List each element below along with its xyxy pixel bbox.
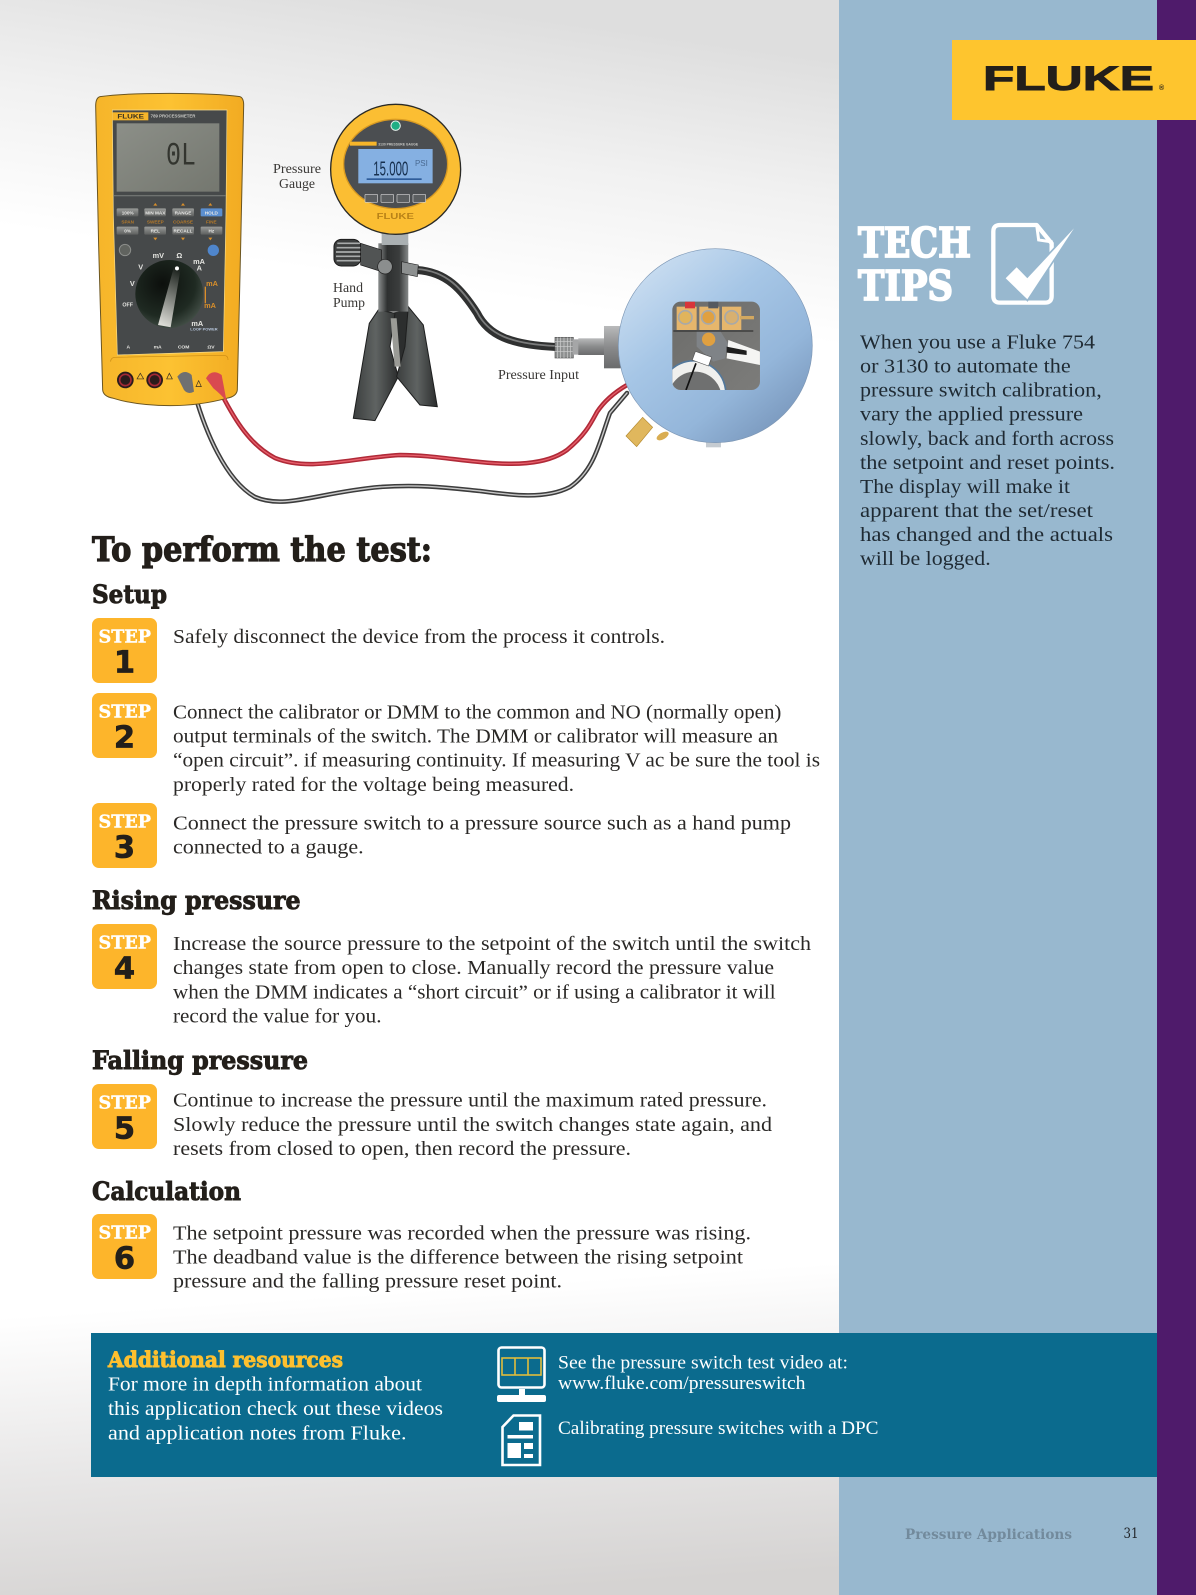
- step 2: [92, 693, 820, 796]
- meter buttons: 0%: [124, 228, 132, 233]
- step 2 badge: 2: [114, 721, 135, 756]
- label: hand pump: [333, 281, 365, 311]
- step 6: [92, 1214, 751, 1293]
- video link: [558, 1353, 848, 1394]
- gauge LCD: PSI: [415, 159, 428, 168]
- step 4 text: record the value for you.: [173, 1006, 382, 1028]
- illustration: multimeter: [96, 93, 244, 406]
- step 2 text: [173, 701, 820, 796]
- dial labels: A: [197, 264, 203, 273]
- label: pressure gauge: Gauge: [279, 177, 315, 192]
- dial labels: A: [127, 344, 131, 350]
- step 2 text: output terminals of the switch. The DMM or calibrator will measure an: [173, 725, 778, 747]
- dial labels: mA: [191, 319, 204, 328]
- step 4 badge: [92, 924, 157, 989]
- section heading: falling pressure: Falling pressure: [92, 1046, 308, 1075]
- meter buttons: FINE: [206, 220, 217, 225]
- switch housing: [618, 249, 812, 443]
- step 3 badge: 3: [114, 831, 135, 866]
- rotary dial: [135, 260, 205, 328]
- meter buttons: RECALL: [174, 228, 193, 233]
- Fluke logo: FLUKE: [983, 60, 1154, 98]
- dial labels: COM: [178, 344, 189, 350]
- step 5: [92, 1084, 772, 1160]
- step 1 badge: 1: [114, 646, 135, 681]
- step 6 text: [173, 1222, 751, 1293]
- gauge LCD: [358, 149, 433, 183]
- main heading: To perform the test:: [92, 530, 432, 570]
- contact plate: [697, 332, 728, 362]
- dial labels: ΩV: [207, 344, 215, 350]
- dial labels: mV: [153, 251, 164, 260]
- tech tips text: When you use a Fluke 754: [860, 331, 1095, 353]
- dial labels: mA: [206, 279, 219, 288]
- resources heading: Additional resources: [107, 1347, 343, 1372]
- gauge LCD: 15.000: [373, 158, 408, 181]
- LCD display: FLUKE: [117, 114, 144, 121]
- gauge case: [331, 104, 461, 234]
- LCD display: 0L: [166, 137, 196, 174]
- icon: video monitor: [497, 1348, 546, 1402]
- step 6 badge: [92, 1214, 157, 1279]
- meter buttons: 100%: [122, 210, 134, 215]
- step 6 badge: STEP: [98, 1224, 151, 1244]
- step 6 badge: 6: [114, 1242, 135, 1277]
- application note link: Calibrating pressure switches with a DPC: [558, 1419, 878, 1439]
- illustration: test lead wires: [195, 385, 627, 502]
- step 4 text: when the DMM indicates a “short circuit” or if using a calibrator it will: [173, 981, 776, 1003]
- gauge brand tag: 3130 PRESSURE GAUGE: [378, 142, 419, 146]
- meter buttons: RANGE: [175, 210, 191, 215]
- meter buttons: HOLD: [205, 210, 219, 215]
- meter body: [96, 93, 244, 406]
- label: pressure gauge: Pressure: [273, 162, 321, 177]
- tech tips heading: [858, 219, 971, 310]
- meter face: [112, 110, 227, 355]
- pump column: [378, 243, 408, 312]
- tech tips text: The display will make it: [860, 476, 1070, 498]
- resources text: For more in depth information about: [108, 1374, 422, 1396]
- gauge face: [344, 119, 448, 209]
- footer section name: Pressure Applications: [905, 1527, 1072, 1543]
- step 5 text: Continue to increase the pressure until the maximum rated pressure.: [173, 1090, 767, 1112]
- step 1: [92, 618, 665, 683]
- step 4 text: changes state from open to close. Manually record the pressure value: [173, 957, 774, 979]
- video link: See the pressure switch test video at:: [558, 1353, 848, 1373]
- step 3 badge: STEP: [98, 813, 151, 833]
- step 5 text: [173, 1090, 772, 1160]
- step 3 badge: [92, 803, 157, 868]
- hose fitting: [555, 326, 621, 368]
- step 3 text: [173, 812, 791, 858]
- label: hand pump: Hand: [333, 281, 363, 296]
- step 2 badge: [92, 693, 157, 758]
- pump neck: [382, 232, 408, 245]
- dial labels: mA: [193, 257, 206, 266]
- video link: www.fluke.com/pressureswitch: [558, 1374, 806, 1394]
- dial labels: mA: [204, 301, 217, 310]
- pump knob: [334, 239, 418, 277]
- step 3 text: connected to a gauge.: [173, 836, 364, 858]
- terminals: [673, 302, 754, 331]
- dial labels: [122, 251, 219, 350]
- dial labels: Ω: [176, 251, 182, 260]
- meter buttons: SWEEP: [147, 220, 164, 225]
- purple edge band: [1157, 0, 1196, 1595]
- icon: checklist document: [993, 225, 1074, 303]
- tech tips text: will be logged.: [860, 548, 991, 570]
- brass fittings: [626, 417, 721, 447]
- step 1 badge: [92, 618, 157, 683]
- step 4 badge: STEP: [98, 934, 151, 954]
- step 3 text: Connect the pressure switch to a pressure source such as a hand pump: [173, 812, 791, 834]
- illustration: pressure hose: [417, 269, 556, 347]
- step 4: [92, 924, 811, 1028]
- step 6 text: The setpoint pressure was recorded when the pressure was rising.: [173, 1222, 751, 1244]
- meter buttons: COARSE: [173, 220, 193, 225]
- illustration: pressure switch: [555, 249, 812, 447]
- step 3: [92, 803, 791, 868]
- resources text: this application check out these videos: [108, 1398, 443, 1420]
- step 6 text: pressure and the falling pressure reset point.: [173, 1271, 562, 1293]
- step 2 badge: STEP: [98, 703, 151, 723]
- pump legs: [353, 307, 437, 421]
- step 2 text: “open circuit”. if measuring continuity. If measuring V ac be sure the tool is: [173, 750, 820, 772]
- top background shading: [0, 0, 840, 400]
- Fluke logo: [952, 40, 1196, 120]
- step 5 badge: 5: [114, 1112, 135, 1147]
- tech tips text: apparent that the set/reset: [860, 500, 1093, 522]
- step 5 text: resets from closed to open, then record the pressure.: [173, 1138, 631, 1160]
- step 6 text: The deadband value is the difference between the rising setpoint: [173, 1246, 743, 1268]
- step 5 badge: STEP: [98, 1094, 151, 1114]
- tech tips text: slowly, back and forth across: [860, 428, 1114, 450]
- section heading: calculation: Calculation: [92, 1177, 241, 1206]
- meter buttons: Hz: [208, 228, 215, 233]
- meter buttons: SPAN: [121, 220, 135, 225]
- step 4 text: [173, 933, 811, 1028]
- meter buttons: MIN MAX: [145, 210, 166, 215]
- meter side buttons: [119, 244, 219, 256]
- step 1 badge: STEP: [98, 628, 151, 648]
- power button: [391, 121, 400, 130]
- page number: 31: [1124, 1526, 1138, 1542]
- switch terminal window: [672, 302, 760, 390]
- meter buttons: REL: [151, 228, 160, 233]
- step 4 badge: 4: [114, 952, 135, 987]
- resources text: and application notes from Fluke.: [108, 1422, 406, 1444]
- input jacks: [111, 355, 228, 388]
- section heading: setup: Setup: [92, 580, 167, 609]
- label: pressure gauge: [273, 162, 321, 192]
- step 5 text: Slowly reduce the pressure until the switch changes state again, and: [173, 1114, 772, 1136]
- dial labels: V: [130, 279, 135, 288]
- LCD display: [112, 112, 226, 196]
- tech tips text: [860, 331, 1115, 570]
- tech tips text: has changed and the actuals: [860, 524, 1113, 546]
- Fluke logo: ®: [1159, 84, 1165, 92]
- panel: additional resources: [91, 1333, 1157, 1477]
- LCD display: 789 PROCESSMETER: [151, 114, 196, 119]
- scale dial: [672, 360, 726, 390]
- tech tips heading: TECH: [858, 219, 971, 267]
- tech tips heading: TIPS: [858, 262, 953, 310]
- dial labels: LOOP POWER: [190, 326, 218, 331]
- meter buttons: [117, 203, 222, 240]
- step 5 badge: [92, 1084, 157, 1149]
- section heading: rising pressure: Rising pressure: [92, 886, 301, 915]
- tech tips text: the setpoint and reset points.: [860, 452, 1115, 474]
- bottom background shading: [0, 1200, 840, 1595]
- illustration: pressure gauge: [331, 104, 461, 234]
- step 2 text: properly rated for the voltage being measured.: [173, 774, 574, 796]
- tech tips text: or 3130 to automate the: [860, 356, 1071, 378]
- dial labels: OFF: [122, 302, 134, 308]
- step 2 text: Connect the calibrator or DMM to the common and NO (normally open): [173, 701, 781, 723]
- gauge buttons: [365, 194, 426, 202]
- step 1 text: Safely disconnect the device from the process it controls.: [173, 626, 665, 648]
- illustration: hand pump: [334, 232, 437, 421]
- tech tips text: vary the applied pressure: [860, 404, 1083, 426]
- step 4 text: Increase the source pressure to the setpoint of the switch until the switch: [173, 933, 811, 955]
- tech tips text: pressure switch calibration,: [860, 380, 1102, 402]
- test lead plugs: [177, 372, 227, 402]
- icon: document: [502, 1416, 540, 1465]
- dial labels: mA: [154, 344, 162, 350]
- dial labels: V: [138, 262, 143, 271]
- resources text: [108, 1374, 443, 1444]
- gauge logo: FLUKE: [377, 212, 415, 221]
- label: pressure input: Pressure Input: [498, 368, 579, 383]
- label: hand pump: Pump: [333, 296, 365, 311]
- side panel: [839, 0, 1157, 1595]
